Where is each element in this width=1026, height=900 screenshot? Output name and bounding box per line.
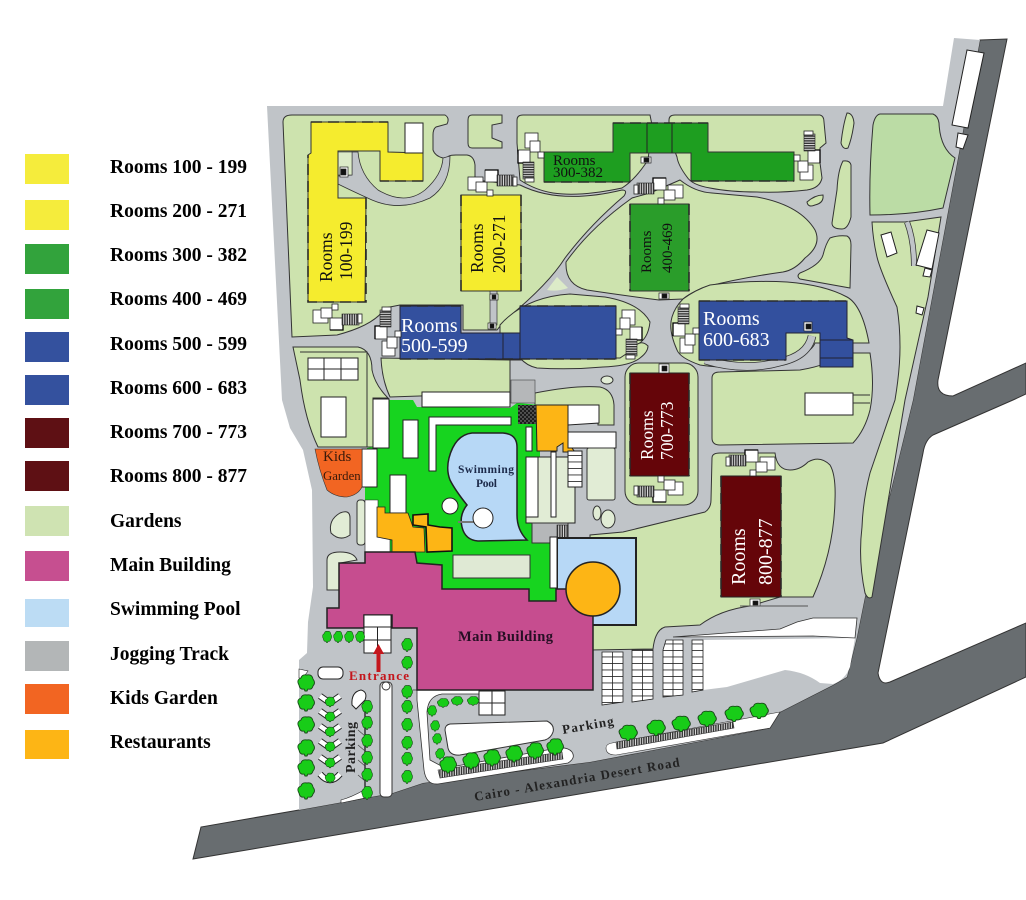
legend item: Rooms 500 - 599: Rooms 500 - 599 xyxy=(110,334,247,355)
restaurants: west pair xyxy=(377,507,452,552)
room block: 400-469: 400-469 xyxy=(660,223,676,273)
room block: 700-773: Rooms xyxy=(637,410,657,460)
legend item: Rooms 300 - 382: Rooms 300 - 382 xyxy=(110,245,247,266)
legend item: Rooms 600 - 683: Rooms 600 - 683 xyxy=(110,378,247,399)
south white grounds xyxy=(413,618,857,784)
room block: 500-599: 500-599 xyxy=(401,335,468,357)
legend item: Main Building xyxy=(25,551,231,581)
track: crescent by block 100 xyxy=(338,152,450,206)
garden: north centre xyxy=(517,115,652,194)
east service buildings xyxy=(526,405,616,543)
room block: 200-271 xyxy=(461,195,521,291)
kids garden: Kids xyxy=(323,449,352,465)
legend item: Rooms 200 - 271: Rooms 200 - 271 xyxy=(110,201,247,222)
legend item: Rooms 100 - 199 xyxy=(25,154,247,184)
room block: 400-469 xyxy=(630,204,689,291)
door units xyxy=(340,157,812,606)
garden: lens below block 500 xyxy=(520,343,648,369)
track: eastern branch xyxy=(907,222,914,266)
legend item: Jogging Track xyxy=(25,641,229,671)
room block: 600-683: 600-683 xyxy=(703,329,770,351)
legend item: Main Building: Main Building xyxy=(110,555,231,576)
legend item: Rooms 200 - 271 xyxy=(25,200,247,230)
legend item: Rooms 100 - 199: Rooms 100 - 199 xyxy=(110,157,247,178)
entrance arrow xyxy=(373,644,384,672)
main building xyxy=(327,552,593,690)
garden: northwest lawn xyxy=(283,115,626,337)
legend item: Restaurants xyxy=(25,730,211,759)
north-east small buildings xyxy=(805,50,984,415)
road network xyxy=(193,39,1026,859)
legend item: Gardens: Gardens xyxy=(110,511,182,532)
legend item: Rooms 700 - 773 xyxy=(25,418,247,448)
garden: above block 500 xyxy=(500,294,650,360)
garden: east of courtyard xyxy=(535,387,614,425)
restaurant: north xyxy=(536,405,575,452)
room block: 600-683: Rooms xyxy=(703,308,760,330)
room block: 400-469: Rooms xyxy=(639,230,655,273)
swimming pool xyxy=(442,433,527,541)
track curves xyxy=(338,152,914,367)
legend item: Rooms 400 - 469 xyxy=(25,289,247,319)
garden: around block 800 xyxy=(590,453,835,650)
room block: 800-877: Rooms xyxy=(728,528,750,585)
room block: 300-382: 300-382 xyxy=(553,165,603,181)
room block: 600-683 xyxy=(699,301,853,367)
legend item: Gardens xyxy=(25,506,182,536)
legend xyxy=(25,154,247,759)
stair towers xyxy=(313,131,820,502)
garden: ring around block 600 xyxy=(671,281,869,368)
pool court lawn xyxy=(365,400,557,601)
south canopy xyxy=(479,691,505,715)
parking bays xyxy=(602,640,703,705)
room block: 200-271: 200-271 xyxy=(489,215,509,273)
garden: small north island xyxy=(468,115,502,148)
kids garden xyxy=(315,449,362,497)
garden: eastern strip xyxy=(861,217,941,598)
pool islands xyxy=(442,498,493,528)
room block: 300-382: Rooms xyxy=(553,153,596,169)
track: link below block 200 xyxy=(490,291,497,325)
legend item: Swimming Pool: Swimming Pool xyxy=(110,599,241,620)
legend item: Kids Garden: Kids Garden xyxy=(110,688,218,709)
block: checker terrace xyxy=(518,405,536,424)
site ground: jogging track xyxy=(267,38,980,810)
label: Swimming Pool: Pool xyxy=(476,478,497,490)
room block: 500-599: Rooms xyxy=(401,315,458,337)
legend item: Swimming Pool xyxy=(25,599,241,627)
restaurant: round xyxy=(566,562,620,616)
legend item: Jogging Track: Jogging Track xyxy=(110,644,229,665)
legend item: Rooms 300 - 382 xyxy=(25,244,247,274)
west parking xyxy=(299,667,392,803)
garden: south of block 500 xyxy=(381,358,510,397)
track: crescent by block 600 xyxy=(705,336,812,367)
legend item: Rooms 400 - 469: Rooms 400 - 469 xyxy=(110,289,247,310)
garden: northeast green xyxy=(870,114,955,215)
garden: south of block 600 xyxy=(712,353,872,445)
kids garden: Garden xyxy=(323,469,361,483)
block: gray services xyxy=(511,380,535,403)
entrance canopy xyxy=(364,615,391,653)
garden: north east of courtyard xyxy=(669,115,826,192)
room block: 100-199: Rooms xyxy=(316,232,336,282)
room block: 700-773 xyxy=(630,373,689,476)
islands xyxy=(327,277,615,590)
legend item: Rooms 800 - 877: Rooms 800 - 877 xyxy=(110,466,247,487)
legend item: Rooms 700 - 773: Rooms 700 - 773 xyxy=(110,422,247,443)
gardens xyxy=(283,113,955,650)
label: Swimming Pool: Swimming xyxy=(458,464,514,476)
trees xyxy=(298,631,768,799)
secondary pool with restaurant xyxy=(550,537,636,625)
room block: 300-382 xyxy=(544,123,794,182)
legend item: Rooms 500 - 599 xyxy=(25,332,247,362)
legend item: Kids Garden xyxy=(25,684,218,714)
room block: 100-199 xyxy=(308,122,423,302)
label: south Parking: Parking xyxy=(561,713,615,737)
room block: 200-271: Rooms xyxy=(467,223,487,273)
room block: 500-599 xyxy=(400,306,616,359)
room block: 800-877: 800-877 xyxy=(755,518,777,585)
room block: 700-773: 700-773 xyxy=(657,401,677,460)
west garden buildings xyxy=(308,358,358,437)
room block: 100-199: 100-199 xyxy=(336,221,356,280)
legend item: Rooms 800 - 877 xyxy=(25,461,247,491)
label: Entrance: Entrance xyxy=(349,668,409,683)
label: Main Building: Main Building xyxy=(458,629,554,645)
label: road name: Cairo - Alexandria Desert Road xyxy=(473,754,681,804)
garden: ring around block 700 xyxy=(625,363,698,505)
garden: central lawn xyxy=(566,180,817,300)
legend item: Rooms 600 - 683 xyxy=(25,375,247,405)
label: west Parking: Parking xyxy=(344,722,359,773)
courtyard white blocks xyxy=(362,392,530,578)
legend item: Restaurants: Restaurants xyxy=(110,732,211,753)
hatch strips xyxy=(438,606,808,778)
room block: 800-877 xyxy=(721,476,781,597)
garden: west block xyxy=(293,347,388,447)
